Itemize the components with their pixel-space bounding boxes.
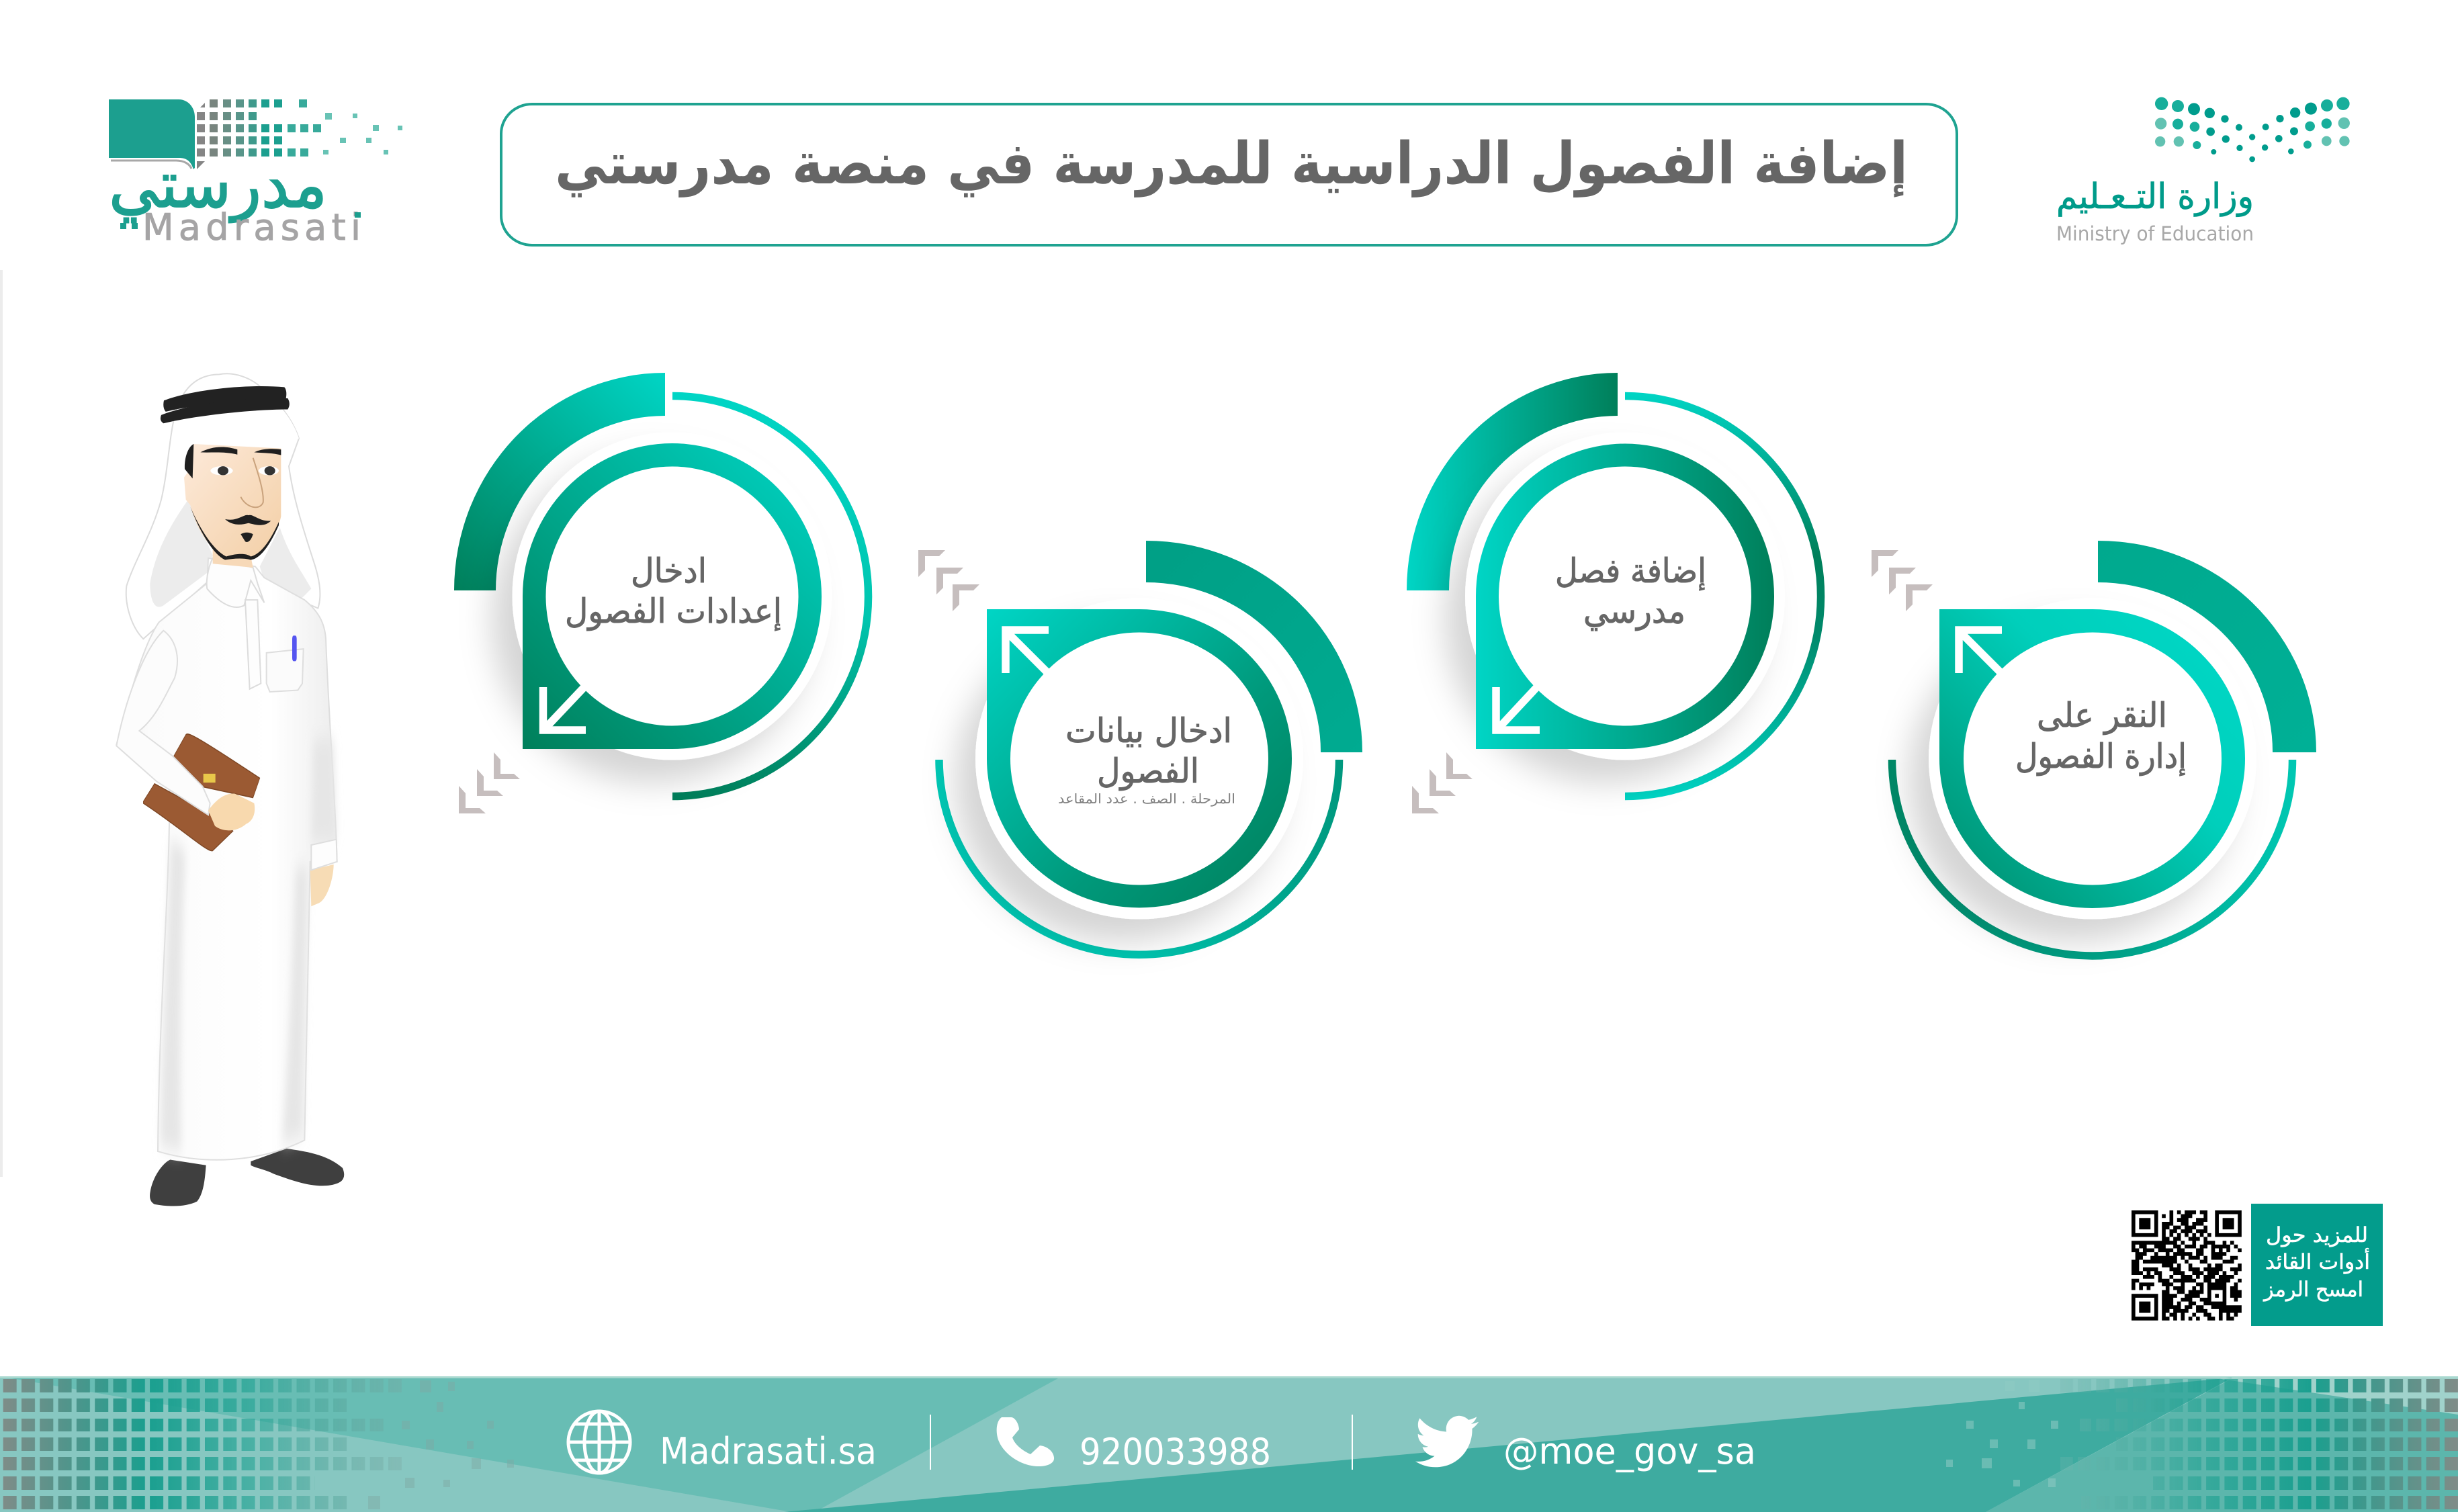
QR caption text xyxy=(2263,1223,2370,1302)
step 2 sub text: المرحلة . الصف . عدد المقاعد xyxy=(1058,791,1235,807)
headscarf shading xyxy=(150,500,311,607)
eyes xyxy=(210,466,279,475)
pen xyxy=(292,635,297,661)
step 3 text xyxy=(1555,551,1706,631)
step 3 text: مدرسي xyxy=(1583,592,1685,631)
step 2 text xyxy=(1058,711,1235,807)
logo accent squares xyxy=(120,212,361,229)
step 4: النقر على إدارة الفصول xyxy=(1872,541,2316,956)
white halo with shadow xyxy=(1465,433,1785,760)
chevrons xyxy=(459,752,520,813)
QR caption text: للمزيد حول xyxy=(2266,1223,2368,1247)
hair xyxy=(185,444,193,478)
QR caption text: امسح الرمز xyxy=(2263,1278,2363,1302)
title box xyxy=(501,104,1957,245)
step 2 text: ادخال بيانات xyxy=(1065,711,1232,750)
thick quarter arc xyxy=(454,373,665,590)
footer band xyxy=(0,1376,2458,1512)
teardrop ring xyxy=(1939,609,2245,908)
white halo with shadow xyxy=(512,433,832,760)
briefcase xyxy=(143,734,260,851)
character: teacher in thobe xyxy=(116,373,344,1206)
step 2: ادخال بيانات الفصول xyxy=(918,541,1362,954)
hand xyxy=(208,793,255,830)
thick quarter arc xyxy=(1407,373,1618,590)
QR block xyxy=(2132,1204,2383,1326)
thin half arc xyxy=(672,396,868,797)
teardrop ring xyxy=(987,609,1292,907)
thick quarter arc xyxy=(2098,541,2316,752)
arrow xyxy=(543,680,591,730)
white inner circle xyxy=(545,466,798,725)
white inner circle xyxy=(1964,633,2222,885)
step 1 text xyxy=(565,551,782,631)
logo: Madrasati xyxy=(109,99,402,249)
thobe xyxy=(116,558,337,1160)
left pixel bars xyxy=(0,1379,406,1509)
step 1 text: إعدادات الفصول xyxy=(565,592,782,631)
headscarf xyxy=(126,373,320,639)
agal xyxy=(161,386,290,423)
teardrop ring xyxy=(1476,443,1774,749)
QR code xyxy=(2132,1210,2242,1321)
collar and placket xyxy=(207,558,264,689)
title text: إضافة الفصول الدراسية للمدرسة في منصة مدرستي xyxy=(555,130,1908,198)
step 4 text: النقر على xyxy=(2037,696,2167,735)
arm xyxy=(116,631,210,815)
step 3 text: إضافة فصل xyxy=(1555,551,1706,591)
face xyxy=(184,444,281,560)
white inner circle xyxy=(1010,633,1268,885)
chevrons xyxy=(1412,752,1473,813)
step 1: ادخال إعدادات الفصول xyxy=(454,373,868,813)
book icon xyxy=(109,99,195,169)
white inner circle xyxy=(1499,466,1751,725)
right pixel bars xyxy=(2060,1379,2458,1509)
left edge strip xyxy=(0,270,3,1177)
ministry dot emblem xyxy=(2155,97,2350,162)
step 3: إضافة فصل مدرسي xyxy=(1407,373,1820,813)
QR caption text: أدوات القائد xyxy=(2265,1248,2370,1274)
neck xyxy=(213,550,253,568)
thick quarter arc xyxy=(1146,541,1362,752)
sleeve cuff and hand xyxy=(310,864,334,906)
left scattered pixels xyxy=(368,1380,514,1509)
divider 1 xyxy=(930,1415,931,1470)
divider 2 xyxy=(1352,1415,1353,1470)
arrow xyxy=(1959,630,2005,676)
right scattered pixels xyxy=(1946,1380,2058,1487)
white halo with shadow xyxy=(975,598,1303,919)
shoes xyxy=(150,1149,344,1206)
headscarf brow xyxy=(177,391,299,449)
thobe side shading xyxy=(160,739,336,1151)
icon: globe xyxy=(568,1411,630,1473)
white halo with shadow xyxy=(1929,598,2256,919)
logo arabic wordmark: مدرستي xyxy=(109,147,327,223)
nose xyxy=(240,458,263,507)
step 4 text: إدارة الفصول xyxy=(2015,737,2187,776)
step 4 text xyxy=(2015,696,2187,776)
logo latin wordmark: Madrasati xyxy=(142,206,361,249)
ministry arabic name: وزارة التـعـليم xyxy=(2056,177,2254,217)
website text: Madrasati.sa xyxy=(660,1430,877,1472)
footer background polygons xyxy=(0,1376,2458,1512)
eyebrows, moustache and beard xyxy=(190,447,281,560)
chevrons xyxy=(918,550,979,611)
ministry english name: Ministry of Education xyxy=(2056,222,2254,245)
icon: twitter bird xyxy=(1415,1416,1479,1467)
chevrons xyxy=(1872,550,1933,611)
step 1 text: ادخال xyxy=(631,551,707,590)
arrow xyxy=(1006,630,1051,676)
QR caption panel xyxy=(2251,1204,2383,1326)
thin half arc xyxy=(1892,760,2292,956)
logo: Ministry of Education xyxy=(2056,97,2350,245)
step 2 text: الفصول xyxy=(1097,752,1199,791)
icon: phone xyxy=(997,1417,1054,1466)
thin half arc xyxy=(939,760,1340,954)
thin half arc xyxy=(1625,396,1820,797)
pocket xyxy=(267,649,304,692)
twitter handle: @moe_gov_sa xyxy=(1503,1430,1756,1472)
book page line xyxy=(111,161,191,169)
arrow xyxy=(1496,680,1544,730)
phone number: 920033988 xyxy=(1080,1431,1271,1473)
teardrop ring xyxy=(523,443,822,749)
pixel squares xyxy=(197,99,402,169)
